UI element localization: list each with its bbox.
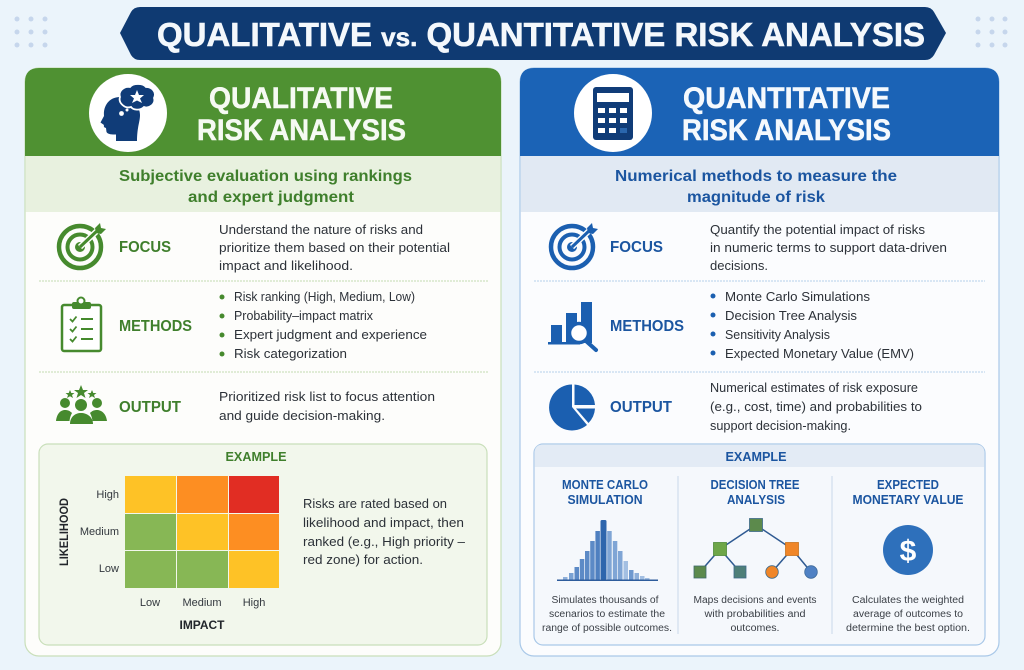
column: decision tree: DECISION TREE bbox=[710, 478, 800, 492]
risk matrix bbox=[57, 476, 279, 632]
methods list bbox=[710, 289, 914, 361]
example box: quantitative techniques: EXAMPLE bbox=[726, 449, 787, 464]
quantitative subtitle band bbox=[521, 156, 998, 212]
example box: quantitative techniques bbox=[534, 444, 985, 645]
output text: support decision-making. bbox=[710, 418, 851, 433]
title banner bbox=[120, 7, 946, 60]
icon: dollar coin: $ bbox=[900, 535, 917, 568]
quantitative subtitle band: magnitude of risk bbox=[687, 189, 825, 206]
matrix explanation: Risks are rated based on bbox=[303, 496, 447, 511]
caption: outcomes. bbox=[730, 623, 780, 634]
qualitative header title bbox=[197, 82, 406, 147]
qualitative header band bbox=[25, 68, 501, 156]
caption: with probabilities and bbox=[703, 609, 806, 620]
caption: Simulates thousands of bbox=[552, 595, 659, 606]
focus text bbox=[710, 222, 947, 273]
row: methods bbox=[548, 289, 914, 361]
row: focus: FOCUS bbox=[610, 239, 663, 256]
output text: and guide decision-making. bbox=[219, 408, 385, 423]
column: expected monetary value: EXPECTED bbox=[877, 478, 939, 492]
methods list bbox=[220, 289, 427, 361]
row: focus bbox=[59, 222, 450, 273]
row: output bbox=[549, 380, 922, 433]
quantitative header title: QUANTITATIVE bbox=[683, 82, 890, 115]
matrix explanation: red zone) for action. bbox=[303, 552, 423, 567]
icon: target bbox=[59, 223, 106, 268]
focus text: Quantify the potential impact of risks bbox=[710, 222, 925, 237]
caption: scenarios to estimate the bbox=[549, 609, 665, 620]
caption bbox=[542, 595, 672, 634]
matrix explanation: likelihood and impact, then bbox=[303, 515, 464, 530]
quantitative header title: RISK ANALYSIS bbox=[682, 114, 891, 147]
column: decision tree bbox=[694, 478, 817, 634]
title: QUALITATIVE vs. QUANTITATIVE RISK ANALYSIS bbox=[157, 16, 925, 53]
caption: determine the best option. bbox=[846, 623, 970, 634]
panel: quantitative bbox=[520, 68, 999, 656]
methods list: Expert judgment and experience bbox=[234, 327, 427, 342]
icon: clipboard bbox=[62, 298, 101, 351]
chart: histogram bbox=[557, 520, 658, 581]
risk matrix: IMPACT bbox=[180, 618, 225, 632]
caption: range of possible outcomes. bbox=[542, 623, 672, 634]
row: output: OUTPUT bbox=[119, 399, 181, 416]
qualitative subtitle band: and expert judgment bbox=[188, 189, 355, 206]
column: expected monetary value bbox=[846, 478, 970, 634]
column: monte carlo: MONTE CARLO bbox=[562, 478, 648, 492]
column: monte carlo: SIMULATION bbox=[568, 493, 642, 507]
focus text: in numeric terms to support data-driven bbox=[710, 240, 947, 255]
example box: risk matrix bbox=[39, 444, 487, 645]
focus text: impact and likelihood. bbox=[219, 258, 353, 273]
qualitative subtitle band: Subjective evaluation using rankings bbox=[119, 168, 412, 185]
matrix explanation: ranked (e.g., High priority – bbox=[303, 534, 466, 549]
quantitative header band bbox=[520, 68, 999, 156]
methods list: Risk categorization bbox=[234, 346, 347, 361]
icon: bar chart with magnifier bbox=[548, 302, 596, 350]
methods list: Monte Carlo Simulations bbox=[725, 289, 870, 304]
icon: team with stars bbox=[56, 385, 107, 424]
risk matrix: Medium bbox=[80, 526, 119, 538]
icon: dollar coin bbox=[883, 525, 933, 575]
risk matrix: High bbox=[243, 597, 265, 609]
row: focus bbox=[551, 222, 947, 273]
methods list: Expected Monetary Value (EMV) bbox=[725, 346, 914, 361]
caption: Calculates the weighted bbox=[852, 595, 964, 606]
icon: pie chart bbox=[549, 384, 595, 430]
quantitative subtitle band: Numerical methods to measure the bbox=[615, 168, 897, 185]
caption bbox=[694, 595, 816, 634]
icon: target bbox=[551, 223, 598, 268]
output text bbox=[710, 380, 922, 433]
qualitative header title: RISK ANALYSIS bbox=[197, 114, 406, 147]
output text: Prioritized risk list to focus attention bbox=[219, 389, 435, 404]
row: methods bbox=[62, 289, 427, 361]
risk matrix: High bbox=[96, 489, 119, 501]
methods list: Decision Tree Analysis bbox=[725, 308, 857, 323]
output text: (e.g., cost, time) and probabilities to bbox=[710, 399, 922, 414]
risk matrix: LIKELIHOOD bbox=[57, 498, 71, 566]
matrix explanation bbox=[303, 496, 466, 567]
methods list: Sensitivity Analysis bbox=[725, 327, 830, 342]
row: methods: METHODS bbox=[610, 318, 684, 335]
risk matrix: Low bbox=[99, 563, 119, 575]
methods list: Risk ranking (High, Medium, Low) bbox=[234, 289, 415, 304]
quantitative header title bbox=[682, 82, 891, 147]
focus text: decisions. bbox=[710, 258, 768, 273]
icon: head with thought bubble bbox=[89, 74, 167, 152]
focus text: Understand the nature of risks and bbox=[219, 222, 423, 237]
qualitative header title: QUALITATIVE bbox=[209, 82, 393, 115]
caption: Maps decisions and events bbox=[694, 595, 816, 606]
example box: risk matrix: EXAMPLE bbox=[226, 449, 287, 464]
output text bbox=[219, 389, 435, 423]
row: output: OUTPUT bbox=[610, 399, 672, 416]
caption: average of outcomes to bbox=[853, 609, 963, 620]
column: expected monetary value: MONETARY VALUE bbox=[852, 493, 964, 507]
output text: Numerical estimates of risk exposure bbox=[710, 380, 918, 395]
risk matrix: Medium bbox=[182, 597, 222, 609]
row: output bbox=[56, 385, 435, 424]
panel: qualitative bbox=[25, 68, 501, 656]
column: monte carlo bbox=[542, 478, 672, 634]
risk matrix: Low bbox=[140, 597, 160, 609]
chart: decision tree bbox=[694, 518, 817, 578]
column: decision tree: ANALYSIS bbox=[727, 493, 785, 507]
methods list: Probability–impact matrix bbox=[234, 308, 374, 323]
row: methods: METHODS bbox=[119, 318, 192, 335]
focus text: prioritize them based on their potential bbox=[219, 240, 450, 255]
qualitative subtitle band bbox=[26, 156, 500, 212]
icon: calculator bbox=[574, 74, 652, 152]
focus text bbox=[219, 222, 450, 273]
caption bbox=[846, 595, 970, 634]
row: focus: FOCUS bbox=[119, 239, 171, 256]
